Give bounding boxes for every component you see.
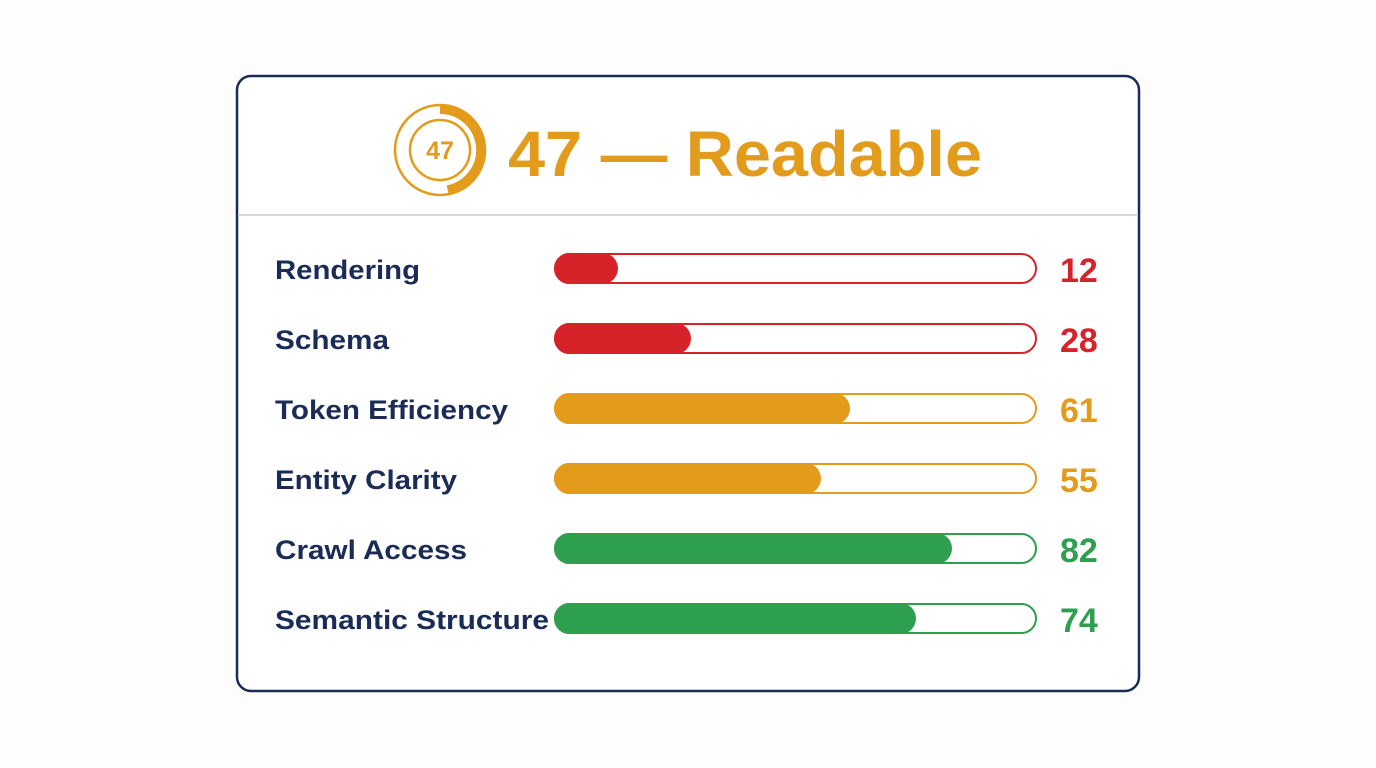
icon: score ring <box>395 105 485 195</box>
row: Semantic Structure <box>275 602 1098 640</box>
row: Token Efficiency: Token Efficiency <box>275 395 508 425</box>
row: Crawl Access <box>275 532 1098 570</box>
row: Schema: Schema <box>275 325 390 355</box>
row: Rendering: 12 <box>1060 252 1098 290</box>
row: Token Efficiency: 61 <box>1060 392 1098 430</box>
panel: score card <box>237 76 1139 691</box>
row: Schema: 28 <box>1060 322 1098 360</box>
row: Entity Clarity <box>275 462 1098 500</box>
row: Entity Clarity: 55 <box>1060 462 1098 500</box>
row: Semantic Structure: Semantic Structure <box>275 605 549 635</box>
row: Entity Clarity: Entity Clarity <box>275 465 457 495</box>
icon: score ring: 47 <box>426 137 454 165</box>
row: Crawl Access: 82 <box>1060 532 1098 570</box>
row: Schema <box>275 322 1098 360</box>
row: Rendering <box>275 252 1098 290</box>
row: Rendering: Rendering <box>275 255 420 285</box>
row: Token Efficiency <box>275 392 1098 430</box>
row: Crawl Access: Crawl Access <box>275 535 467 565</box>
title: 47 — Readable <box>508 118 982 190</box>
row: Semantic Structure: 74 <box>1060 602 1098 640</box>
